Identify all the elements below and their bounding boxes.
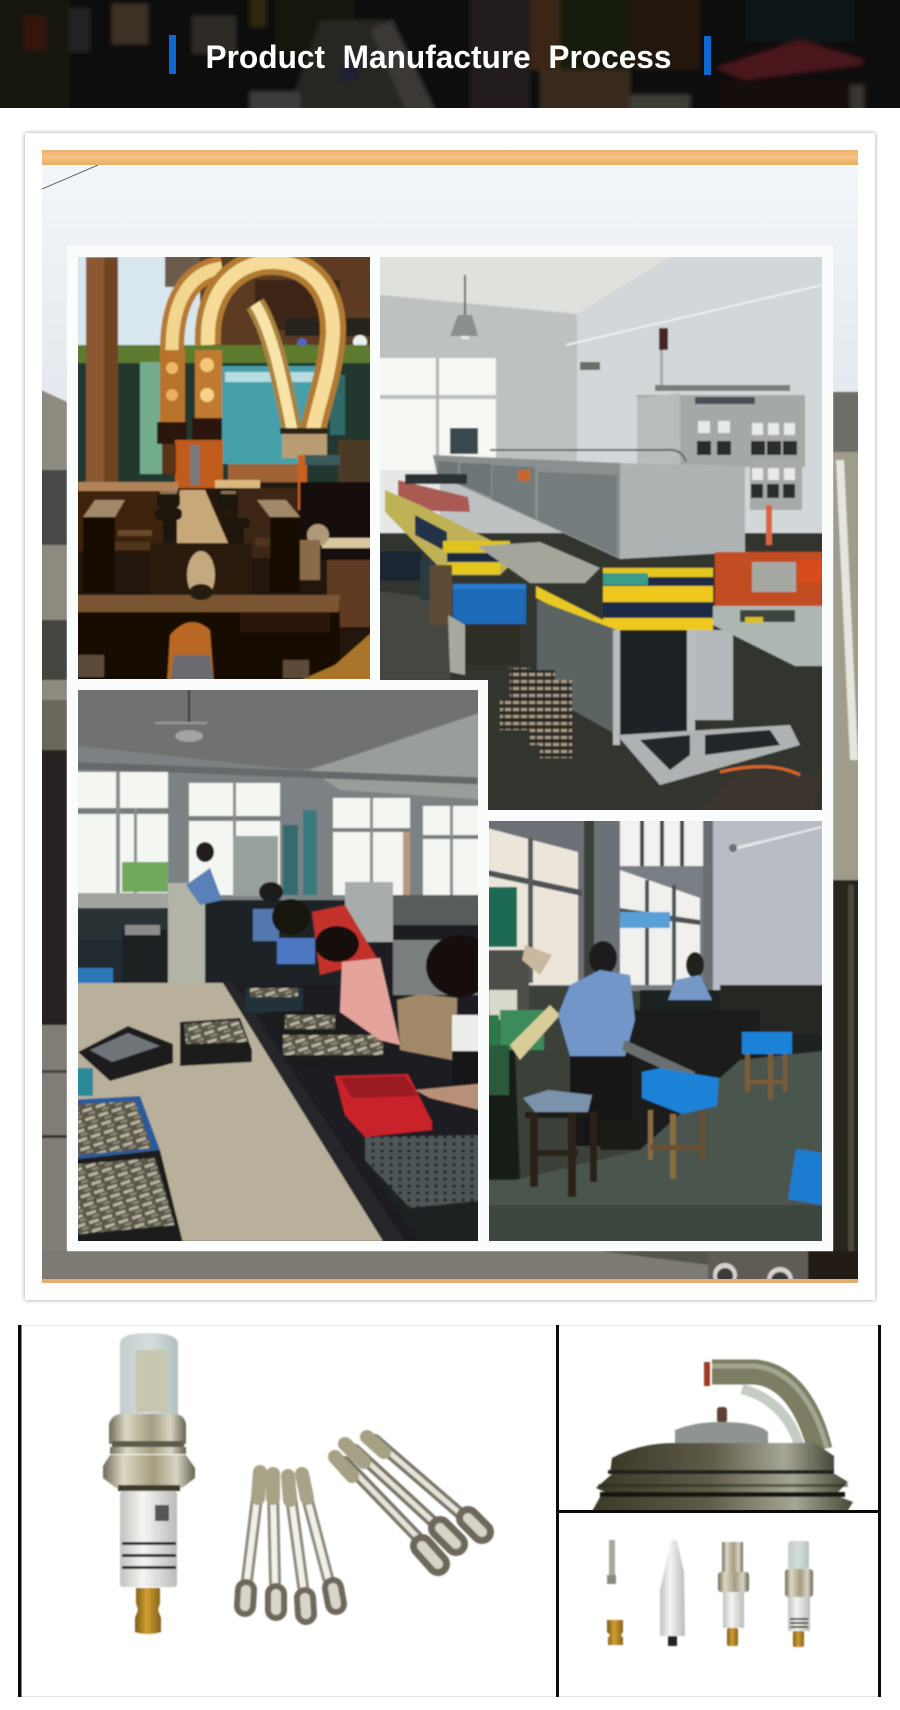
card background [25,133,875,1300]
pull out tray [477,542,600,583]
left window [489,821,585,987]
blue crate back [742,1032,792,1100]
header right blue bar [704,36,711,75]
white corner frame for workers photo [67,680,488,1251]
panel: product photos strip [18,1325,881,1697]
photo: conveyor oven line [370,247,832,820]
icon: assembled plug [718,1542,749,1646]
header left blue bar [169,35,176,74]
rod chute [622,1040,695,1082]
floor [479,1050,832,1251]
header banner [0,0,900,108]
icon: four upright electrodes [245,1472,336,1614]
central block [172,490,228,543]
icon: stages of spark plug assembly [607,1540,813,1647]
control cabinet [637,395,805,467]
platform [68,595,340,612]
blue crate right [788,1149,832,1207]
white photo mat [67,246,833,1251]
photo: assembly line workers [68,680,494,1251]
main worker [558,941,640,1150]
orange top bar [42,150,858,165]
stacked parts [500,668,572,758]
red box [398,480,470,512]
seated workers [253,882,400,1045]
window 1 [68,772,168,894]
blue crate front [642,1068,719,1179]
ceiling fan [155,690,207,742]
tubes [172,262,333,430]
icon: three angled electrodes [335,1437,482,1564]
dark machines [640,990,832,1110]
horizontal divider [556,1510,881,1513]
icon: ceramic insulator [660,1540,685,1646]
oven base [537,600,617,735]
second worker [668,952,712,1000]
lower machine [78,482,178,491]
oven body [433,455,620,559]
window 2 [189,783,280,895]
carton box [397,994,457,1061]
floor [370,533,832,820]
roller unit [715,552,822,606]
icon: center rod [607,1540,616,1584]
icon: finished plug with cap [785,1541,813,1647]
icon: brass terminal [607,1620,623,1645]
dark tray of parts [78,1149,184,1241]
table [68,983,383,1241]
left border [18,1325,22,1697]
red crate [335,1074,432,1137]
standing worker [186,842,222,905]
header title: Product Manufacture Process [206,39,672,75]
window 4 [422,805,478,896]
grey perforated tray [365,1135,488,1208]
bolts [155,492,250,544]
green machine [479,887,560,1095]
icon: electrode close-up [590,1362,853,1515]
panel bottom hairline [21,1696,878,1697]
white strip above operators photo [488,810,833,821]
panel top hairline [21,1325,878,1326]
yellow navy stripes [385,490,520,575]
cushion stool [523,1090,597,1197]
orange bottom strip [42,1279,858,1283]
window 3 [333,798,410,895]
foreground worker [416,935,478,1111]
header street photo [0,0,900,108]
middle divider [556,1325,559,1697]
blue tray of parts [68,1096,160,1160]
icon: large spark plug with cap [103,1333,195,1634]
right border [878,1325,881,1697]
faded building background photo [30,165,870,1293]
photo: glowing copper tubes machine [78,257,370,679]
belt trays [244,986,384,1056]
panel: factory photo card [25,133,875,1300]
blue crate [453,584,526,624]
right windows [620,811,705,985]
photo: machine operators [479,811,832,1251]
trays on table [78,1026,173,1081]
